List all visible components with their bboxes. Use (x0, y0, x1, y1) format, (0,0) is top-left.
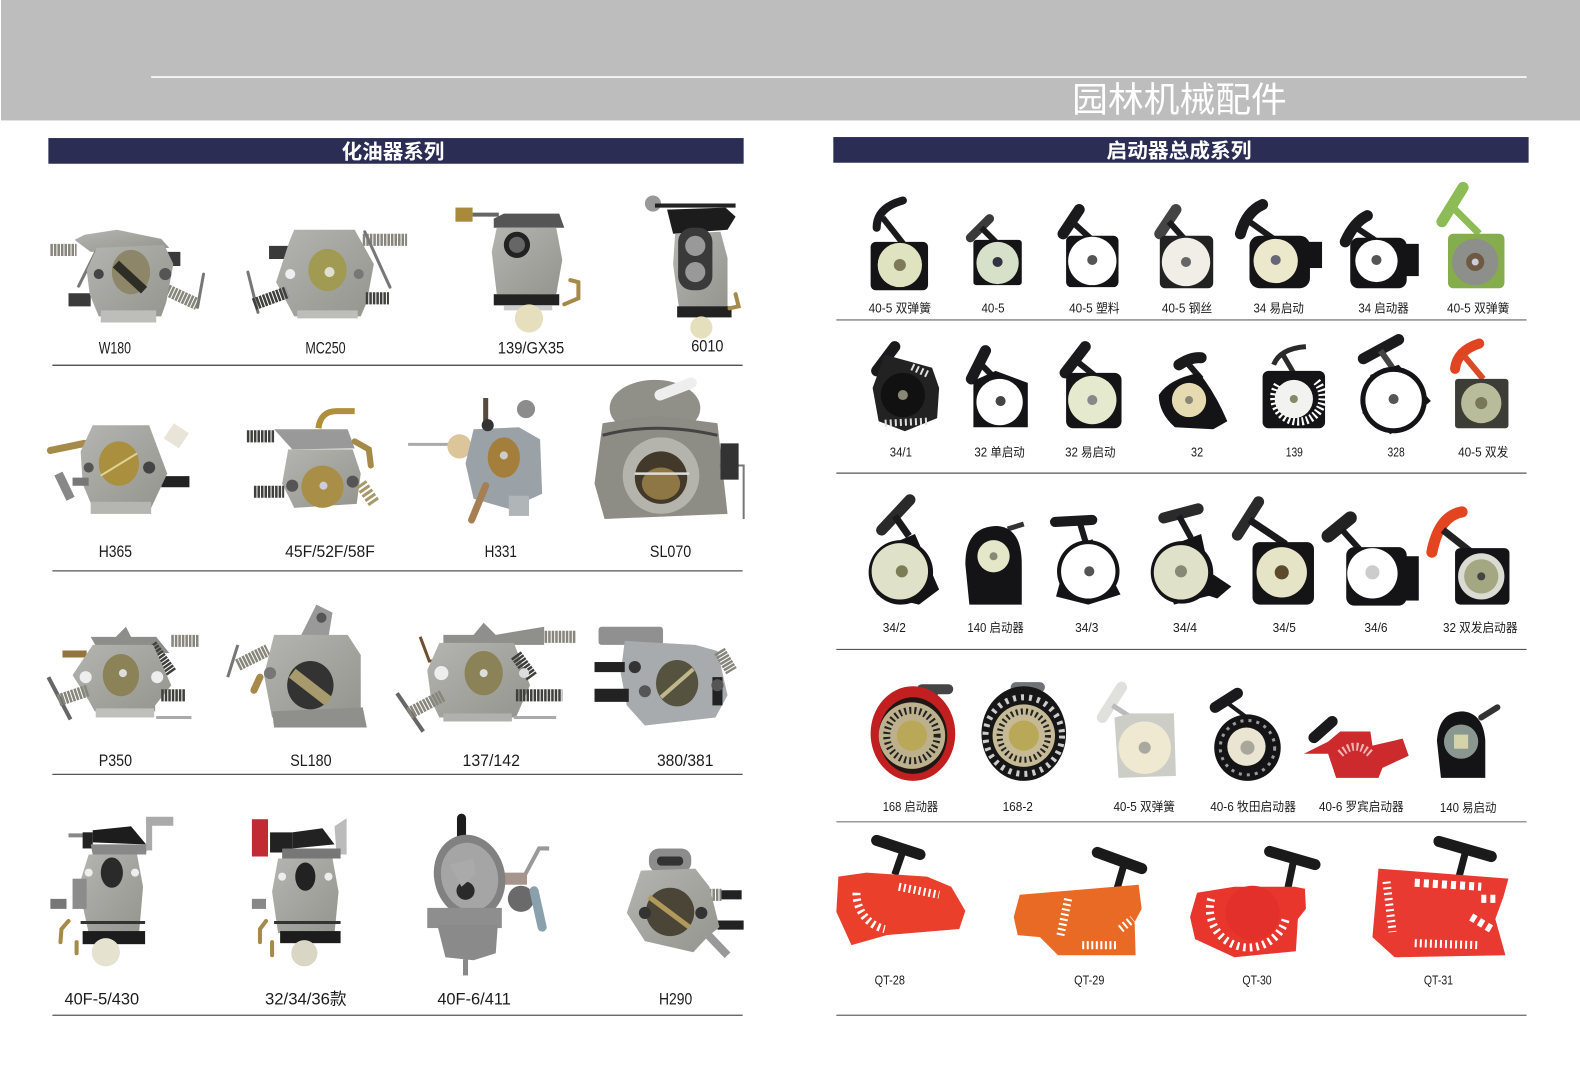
label: QT-31 (1424, 973, 1453, 987)
label: 40-6 牧田启动器 (1210, 800, 1296, 814)
starter 140 (965, 524, 1024, 635)
label: 34/1 (890, 445, 912, 459)
heading: carburetor series (48, 138, 744, 164)
starter 32 double start (1432, 512, 1518, 635)
label: 34/6 (1364, 621, 1388, 635)
label: 34 启动器 (1358, 301, 1409, 315)
label: 34 易启动 (1254, 301, 1304, 315)
label: 380/381 (657, 751, 713, 770)
label: 328 (1388, 445, 1405, 459)
heading: carburetor series: 化油器系列 (342, 141, 444, 164)
starter 40-5 plastic (1063, 210, 1120, 315)
label: 140 易启动 (1440, 801, 1496, 815)
carburetor SL180 (228, 605, 367, 770)
label: 140 启动器 (967, 621, 1024, 635)
label: 168-2 (1003, 800, 1033, 814)
heading: starter assembly series (833, 137, 1529, 163)
label: 32/34/36款 (265, 990, 347, 1009)
label: 40F-5/430 (64, 990, 139, 1009)
starter 34 easy start (1240, 205, 1322, 315)
carburetor W180 (50, 230, 204, 358)
label: W180 (99, 339, 131, 358)
carburetor H331 (408, 398, 542, 561)
label: P350 (99, 751, 132, 770)
label: 40-5 双弹簧 (869, 300, 931, 315)
label: 32 双发启动器 (1443, 620, 1518, 635)
label: 6010 (691, 337, 723, 356)
carburetor 40F-5/430 (50, 818, 173, 1009)
starter 40-5 steel wire (1160, 210, 1213, 315)
label: 34/4 (1173, 621, 1197, 635)
label: 139 (1286, 445, 1303, 459)
header band (1, 0, 1580, 120)
label: 32 单启动 (974, 445, 1025, 459)
label: H290 (659, 990, 692, 1009)
starter 168-2 (981, 686, 1066, 814)
starter 139 (1263, 347, 1325, 459)
starter 40-5 green (1442, 187, 1509, 315)
starter cover QT-30 (1190, 851, 1315, 987)
label: QT-28 (875, 973, 905, 987)
carburetor 137/142 (397, 623, 576, 770)
carburetor 380/381 (595, 627, 732, 770)
starter 168 (871, 686, 955, 814)
starter 34/5 (1237, 502, 1314, 635)
label: 34/3 (1075, 621, 1098, 635)
carburetor 6010 (645, 195, 739, 356)
label: 40-5 双弹簧 (1447, 300, 1509, 315)
carburetor 139/GX35 (455, 208, 578, 358)
starter 40-5 double start (1455, 344, 1509, 459)
label: 32 易启动 (1065, 445, 1115, 459)
carburetor H290 (627, 848, 744, 1009)
starter 32 single start (971, 351, 1028, 459)
label: 40-5 (981, 301, 1005, 315)
starter 32 easy start (1065, 347, 1122, 459)
label: QT-29 (1074, 973, 1104, 987)
label: H365 (99, 542, 132, 561)
carburetor H365 (50, 425, 189, 561)
starter cover QT-31 (1372, 841, 1508, 987)
starter 40-6 Makita (1210, 693, 1296, 814)
starter 34/2 (869, 500, 939, 635)
label: SL070 (650, 542, 691, 561)
label: 40-5 双发 (1458, 444, 1509, 459)
starter 40-6 Robin (1304, 721, 1409, 814)
starter 34/4 (1151, 509, 1231, 635)
starter 40-5 white (1102, 687, 1176, 814)
starter 34 (1345, 216, 1419, 315)
carburetor 40F-6/411 (425, 818, 549, 1009)
label: 40F-6/411 (437, 990, 511, 1009)
label: 137/142 (463, 751, 520, 770)
starter 34/6 (1328, 518, 1419, 635)
label: QT-30 (1242, 973, 1272, 987)
starter 140 easy start (1437, 707, 1497, 815)
panel: starter assembly series (833, 137, 1529, 1015)
label: MC250 (305, 339, 346, 358)
carburetor SL070 (595, 380, 744, 561)
panel: carburetor series (48, 138, 744, 1015)
starter cover QT-29 (1014, 852, 1142, 987)
label: 40-5 双弹簧 (1113, 799, 1175, 814)
page title: 园林机械配件 (1072, 81, 1287, 120)
label: 168 启动器 (883, 800, 938, 814)
starter 34/3 (1055, 520, 1121, 635)
label: 139/GX35 (498, 339, 564, 358)
carburetor MC250 (248, 230, 407, 358)
label: 34/5 (1273, 621, 1296, 635)
starter 34/1 (873, 347, 939, 459)
label: 40-6 罗宾启动器 (1319, 799, 1404, 814)
carburetor 32/34/36 (252, 818, 347, 1009)
label: 32 (1191, 445, 1203, 459)
label: 34/2 (883, 621, 906, 635)
label: SL180 (290, 751, 332, 770)
starter 40-5 (970, 219, 1022, 315)
starter 32 (1159, 358, 1227, 459)
carburetor P350 (48, 627, 200, 770)
carburetor 45F/52F/58F (247, 411, 375, 561)
label: 40-5 塑料 (1069, 301, 1120, 315)
starter 328 (1360, 340, 1431, 459)
label: 45F/52F/58F (285, 542, 375, 561)
label: 40-5 钢丝 (1162, 301, 1212, 315)
starter cover QT-28 (836, 840, 965, 987)
heading: starter assembly series: 启动器总成系列 (1106, 139, 1252, 163)
label: H331 (485, 542, 517, 561)
starter 40-5 double spring (869, 201, 931, 315)
